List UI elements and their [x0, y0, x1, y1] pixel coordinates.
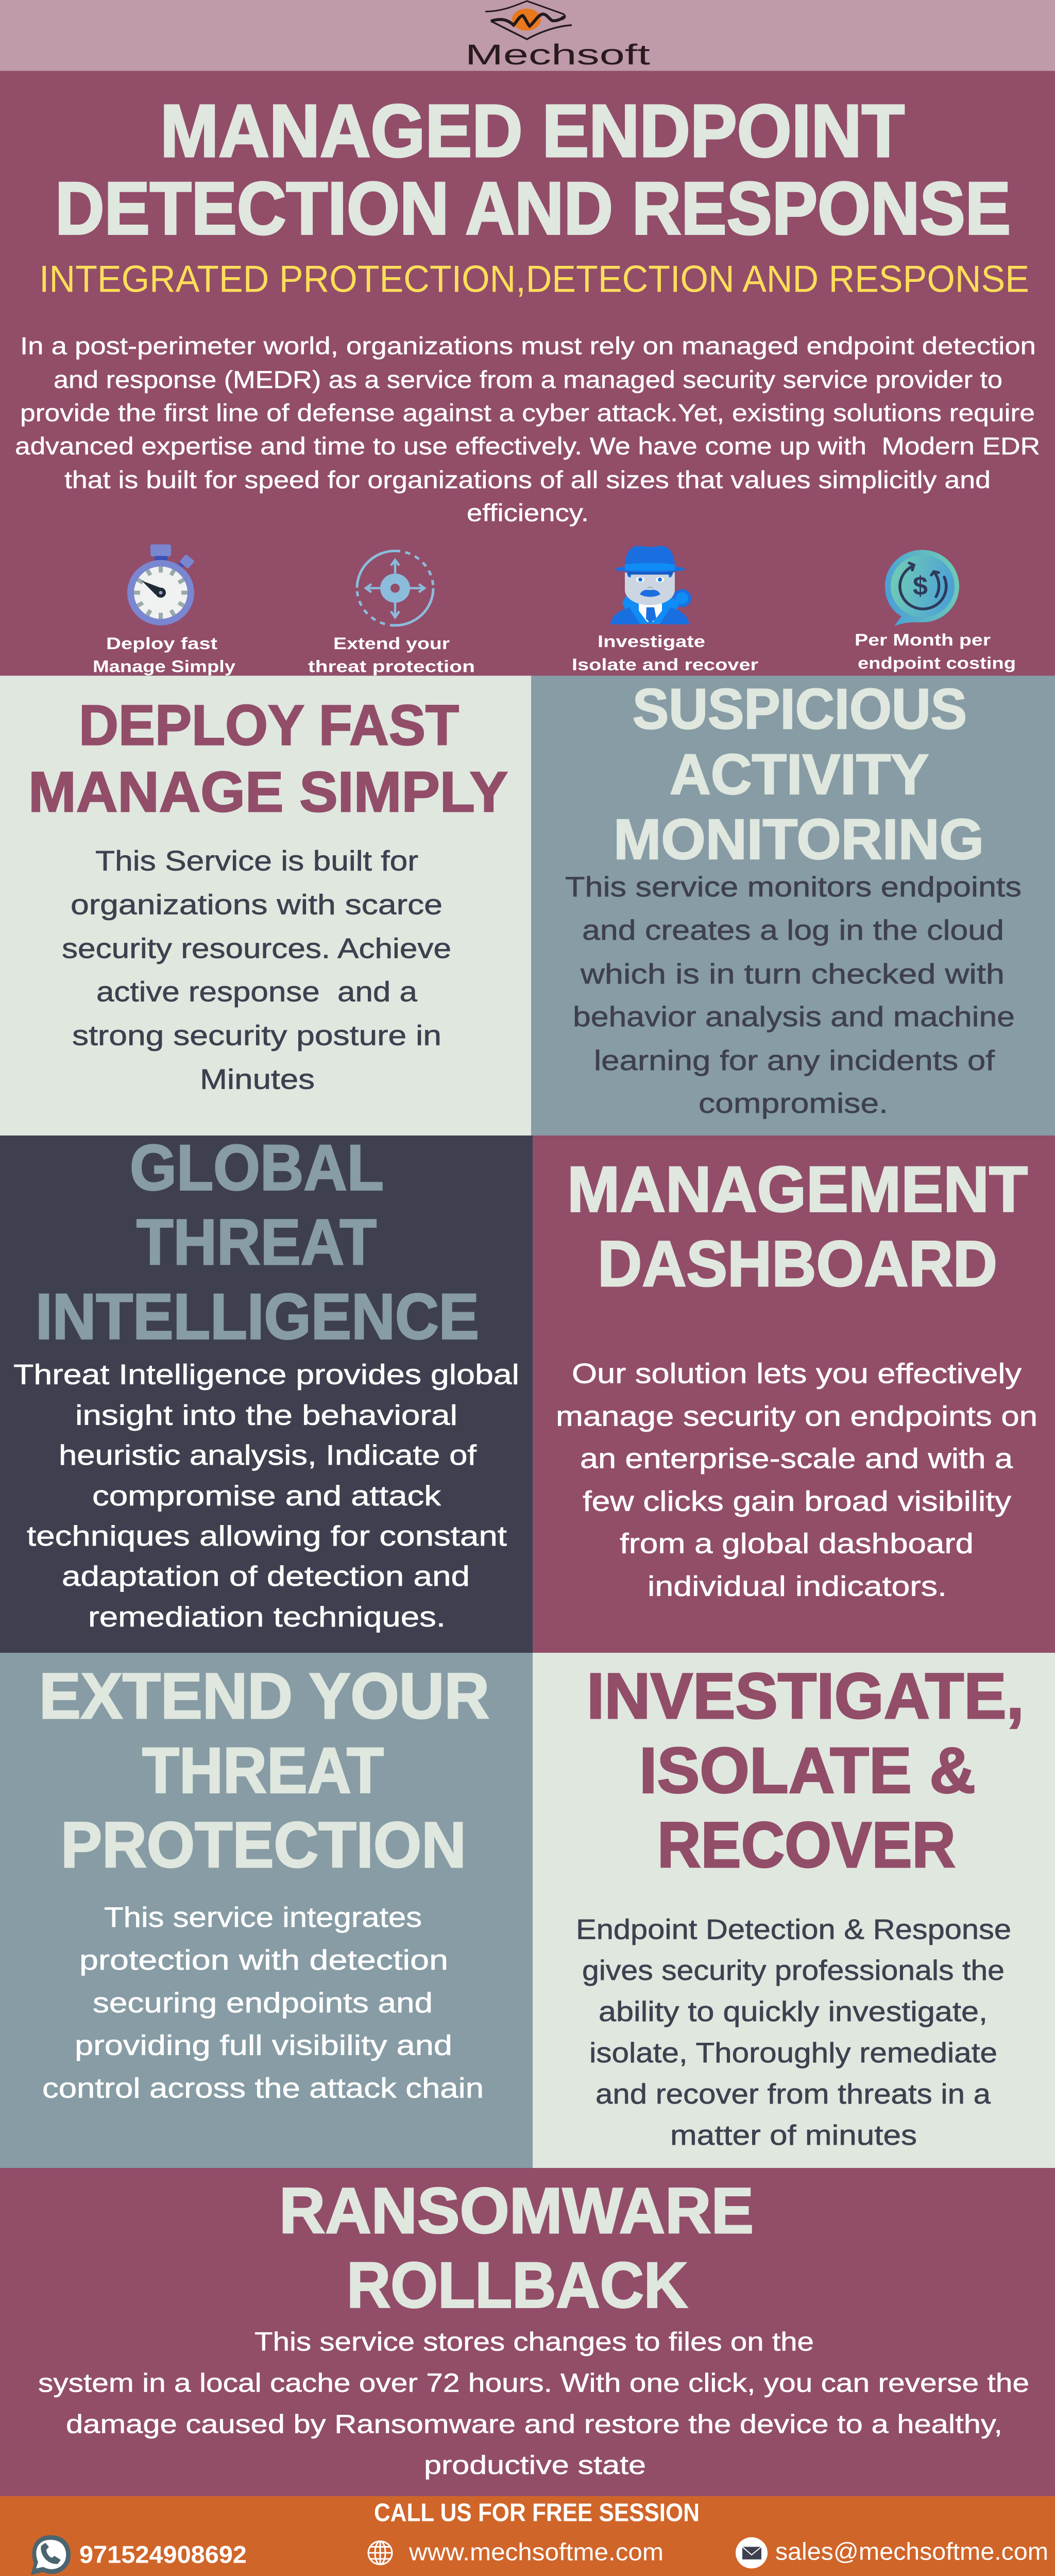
icon: threat target: [357, 551, 433, 625]
caption: deploy fast: Manage Simply: [93, 657, 235, 676]
body text: compromise.: [699, 1088, 888, 1119]
logo wordmark: Mechsoft: [465, 39, 651, 71]
body text: compromise and attack: [92, 1480, 441, 1512]
body text: Threat Intelligence provides global: [13, 1359, 519, 1390]
body text: individual indicators.: [648, 1570, 947, 1602]
icon: per month cost bubble: [885, 550, 959, 626]
heading: DEPLOY FAST: [79, 693, 459, 757]
panel: management dashboard: [533, 1136, 1055, 1653]
body text: Endpoint Detection & Response: [576, 1913, 1011, 1945]
body text: an enterprise-scale and with a: [580, 1443, 1013, 1474]
caption: deploy fast: Deploy fast: [106, 634, 217, 653]
body text: securing endpoints and: [93, 1987, 433, 2019]
body text: [565, 871, 1022, 1119]
caption: per month per endpoint costing: Per Month per: [855, 630, 991, 649]
heading: [587, 1659, 1024, 1881]
body text: manage security on endpoints on: [556, 1400, 1037, 1432]
body text: few clicks gain broad visibility: [583, 1485, 1011, 1517]
panel: global threat intelligence: [0, 1131, 533, 1653]
heading: INVESTIGATE,: [587, 1659, 1024, 1732]
caption: deploy fast: [93, 634, 235, 676]
body text: behavior analysis and machine: [573, 1001, 1015, 1032]
intro paragraph: efficiency.: [467, 500, 589, 527]
body text: gives security professionals the: [582, 1954, 1005, 1986]
heading: SUSPICIOUS: [633, 677, 967, 741]
caption: per month per endpoint costing: endpoint costing: [858, 653, 1016, 672]
body text: security resources. Achieve: [62, 933, 451, 964]
body text: [556, 1358, 1037, 1602]
body text: adaptation of detection and: [62, 1561, 470, 1592]
panel: investigate isolate and recover: [533, 1653, 1055, 2168]
body text: from a global dashboard: [620, 1528, 974, 1560]
heading: [39, 1659, 489, 1881]
body text: insight into the behavioral: [75, 1399, 457, 1431]
body text: Minutes: [200, 1063, 315, 1095]
heading: MANAGE SIMPLY: [28, 760, 508, 824]
heading: [279, 2174, 754, 2321]
body text: which is in turn checked with: [580, 958, 1005, 990]
heading: [614, 677, 984, 871]
heading: THREAT: [142, 1734, 384, 1806]
heading: [28, 693, 508, 824]
body text: and recover from threats in a: [595, 2078, 991, 2110]
intro paragraph: that is built for speed for organizations of all sizes that values simplicitly and: [64, 467, 991, 494]
body text: This service monitors endpoints: [565, 871, 1022, 903]
heading: DASHBOARD: [598, 1227, 997, 1300]
body text: This service stores changes to files on the: [254, 2327, 814, 2356]
body text: Our solution lets you effectively: [572, 1358, 1022, 1389]
body text: [38, 2327, 1029, 2480]
body text: organizations with scarce: [71, 889, 443, 920]
body text: active response and a: [96, 976, 417, 1007]
body text: matter of minutes: [670, 2120, 917, 2151]
email address: sales@mechsoftme.com: [775, 2538, 1048, 2566]
icon: Mechsoft logo mark: [485, 1, 572, 39]
caption: investigate isolate recover: Isolate and recover: [572, 655, 758, 674]
heading: INTELLIGENCE: [36, 1280, 479, 1352]
heading: [36, 1131, 479, 1352]
intro paragraph: advanced expertise and time to use effectively. We have come up with Modern EDR: [15, 433, 1040, 460]
icon: per month cost bubble: $: [913, 571, 928, 600]
heading: MONITORING: [614, 807, 984, 871]
heading: ISOLATE &: [639, 1734, 976, 1806]
body text: [62, 845, 451, 1095]
body text: heuristic analysis, Indicate of: [59, 1439, 477, 1471]
intro paragraph: and response (MEDR) as a service from a managed security service provider to: [54, 366, 1002, 394]
website: www.mechsoftme.com: [409, 2539, 663, 2566]
body text: ability to quickly investigate,: [599, 1995, 988, 2027]
body text: and creates a log in the cloud: [582, 914, 1004, 946]
body text: providing full visibility and: [75, 2029, 452, 2061]
body text: damage caused by Ransomware and restore the device to a healthy,: [66, 2409, 1002, 2439]
icon: globe: [368, 2541, 392, 2565]
body text: learning for any incidents of: [594, 1045, 995, 1076]
caption: investigate isolate recover: Investigate: [598, 632, 705, 651]
body text: remediation techniques.: [88, 1601, 446, 1633]
intro paragraph: provide the first line of defense against a cyber attack.Yet, existing solutions require: [20, 400, 1035, 427]
icon: stopwatch: [127, 545, 195, 625]
heading: THREAT: [137, 1206, 377, 1278]
intro paragraph: In a post-perimeter world, organizations must rely on managed endpoint detection: [20, 333, 1036, 360]
header band with logo: [0, 0, 1055, 71]
panel: suspicious activity monitoring: [531, 676, 1055, 1136]
heading: RECOVER: [657, 1808, 956, 1881]
caption: extend your threat protection: threat protection: [308, 657, 475, 676]
caption: investigate isolate recover: [572, 632, 758, 674]
title: MANAGED ENDPOINT: [160, 89, 905, 172]
heading: PROTECTION: [61, 1808, 466, 1881]
panel: hero introduction: [0, 71, 1055, 676]
heading: [567, 1153, 1028, 1300]
heading: GLOBAL: [130, 1131, 384, 1204]
body text: This Service is built for: [95, 845, 418, 876]
call to action: CALL US FOR FREE SESSION: [374, 2499, 700, 2527]
caption: extend your threat protection: Extend your: [333, 634, 450, 653]
title: [55, 89, 1011, 250]
body text: control across the attack chain: [42, 2072, 484, 2104]
body text: isolate, Thoroughly remediate: [589, 2037, 997, 2069]
body text: system in a local cache over 72 hours. With one click, you can reverse the: [38, 2368, 1029, 2397]
body text: [42, 1902, 484, 2104]
heading: MANAGEMENT: [567, 1153, 1028, 1225]
heading: EXTEND YOUR: [39, 1659, 489, 1732]
footer contact bar: [0, 2496, 1055, 2576]
body text: [576, 1913, 1011, 2151]
heading: RANSOMWARE: [279, 2174, 754, 2247]
panel: ransomware rollback: [0, 2168, 1055, 2496]
body text: [13, 1359, 519, 1633]
body text: techniques allowing for constant: [27, 1520, 507, 1552]
body text: productive state: [424, 2450, 646, 2480]
caption: per month per endpoint costing: [855, 630, 1016, 672]
caption: extend your threat protection: [308, 634, 475, 676]
panel: deploy fast manage simply: [0, 676, 531, 1136]
icon: whatsapp phone: [31, 2535, 71, 2575]
heading: ACTIVITY: [670, 742, 929, 806]
heading: ROLLBACK: [347, 2249, 688, 2321]
body text: This service integrates: [104, 1902, 422, 1933]
body text: protection with detection: [79, 1944, 448, 1976]
icon: email: [736, 2537, 768, 2568]
panel: extend your threat protection: [0, 1653, 533, 2168]
intro paragraph: [15, 333, 1040, 527]
phone number: 971524908692: [79, 2541, 247, 2568]
icon: detective: [610, 546, 691, 624]
body text: strong security posture in: [72, 1020, 441, 1051]
